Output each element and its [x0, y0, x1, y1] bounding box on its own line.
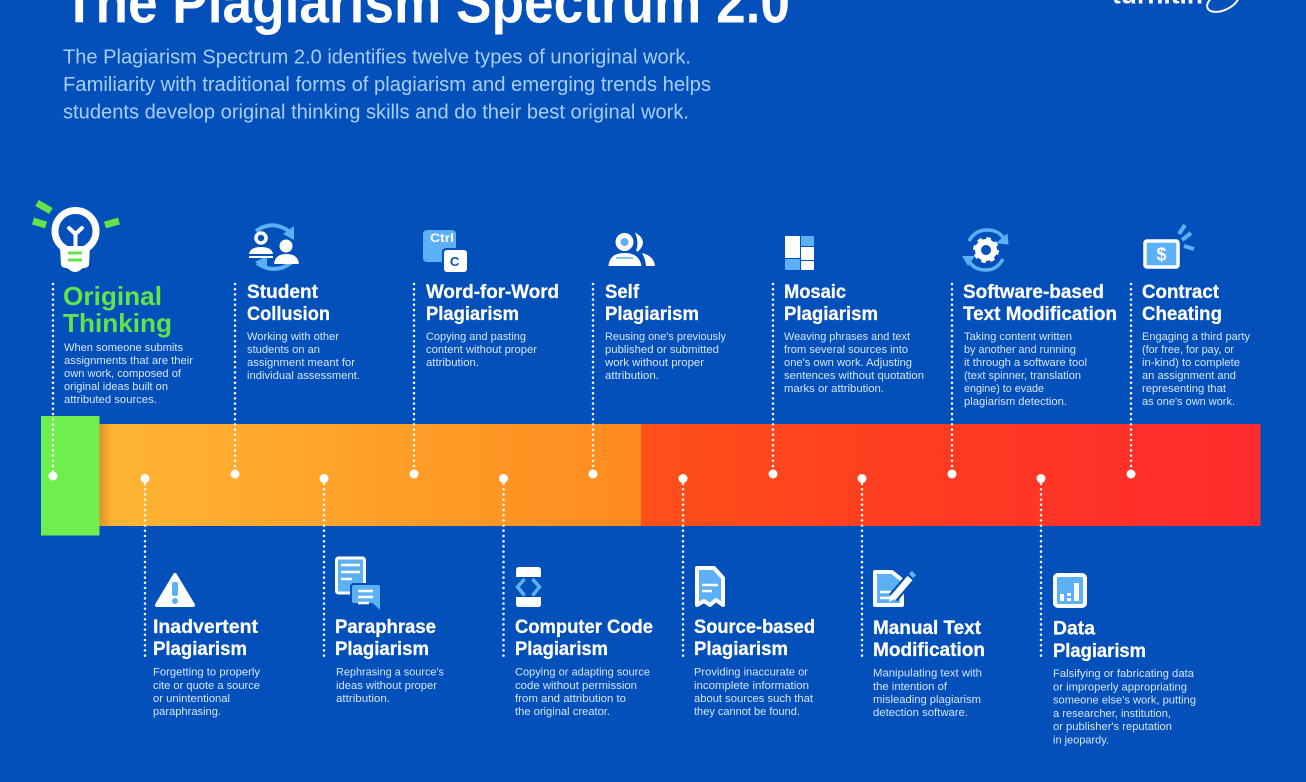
description: Forgetting to properly	[153, 666, 260, 678]
connector	[1130, 284, 1132, 470]
description: Rephrasing a source's	[336, 666, 444, 678]
description	[247, 331, 360, 382]
logo: turnitin	[1112, 0, 1242, 16]
marker dot	[1126, 470, 1136, 478]
heading: Plagiarism	[605, 304, 699, 325]
description: or improperly appropriating	[1053, 682, 1187, 694]
marker dot	[678, 474, 688, 483]
heading: Collusion	[247, 304, 330, 325]
heading: Cheating	[1142, 304, 1222, 325]
heading: Data	[1053, 618, 1095, 640]
heading	[873, 618, 985, 661]
description	[1142, 331, 1250, 408]
marker dot	[499, 474, 508, 483]
heading: Thinking	[63, 308, 172, 338]
description	[426, 331, 537, 369]
description	[694, 666, 814, 718]
description: or unintentional	[153, 693, 230, 705]
description	[1053, 668, 1196, 746]
marker dot	[858, 474, 866, 483]
marker dot	[48, 472, 58, 480]
connector	[234, 284, 236, 470]
intro text: students develop original thinking skills and do their best original work.	[63, 100, 689, 124]
connector	[861, 484, 863, 660]
description: a researcher, institution,	[1053, 708, 1171, 720]
description: attribution.	[426, 357, 479, 369]
description: about sources such that	[694, 693, 814, 705]
item: Mosaic Plagiarism	[768, 236, 924, 478]
item: Paraphrase Plagiarism	[320, 474, 444, 705]
icon: students exchanging	[249, 225, 299, 269]
description: Reusing one's previously	[605, 331, 726, 343]
item: Data Plagiarism	[1036, 474, 1196, 746]
heading	[426, 282, 559, 325]
item: Self Plagiarism	[588, 235, 726, 478]
description: assignment meant for	[247, 357, 355, 369]
description: assignments that are their	[64, 355, 193, 367]
heading: Plagiarism	[153, 639, 247, 660]
heading: Contract	[1142, 282, 1220, 303]
description	[784, 331, 924, 395]
description: one's own work. Adjusting	[784, 357, 912, 369]
icon: gear with cycle arrows	[962, 230, 1010, 270]
marker dot	[588, 470, 598, 478]
intro text: The Plagiarism Spectrum 2.0 identifies twelve types of unoriginal work.	[63, 46, 691, 68]
description: it through a software tool	[964, 357, 1087, 369]
item: Computer Code Plagiarism	[499, 474, 653, 718]
description: Copying or adapting source	[515, 666, 650, 678]
heading: Student	[247, 282, 319, 303]
icon: ctrl c: C	[450, 254, 460, 269]
description: Copying and pasting	[426, 331, 526, 343]
description: Weaving phrases and text	[784, 331, 911, 343]
heading	[153, 617, 259, 660]
description: content without proper	[426, 344, 537, 356]
item: Contract Cheating	[1126, 225, 1250, 478]
description: paraphrasing.	[153, 706, 221, 718]
description: Falsifying or fabricating data	[1053, 668, 1195, 680]
description: from several sources into	[784, 344, 908, 356]
description: they cannot be found.	[694, 706, 800, 718]
heading	[694, 617, 815, 660]
marker dot	[230, 470, 240, 478]
heading	[63, 281, 172, 338]
connector	[951, 284, 953, 470]
icon: money screen: $	[1156, 244, 1167, 264]
description: in-kind) to complete	[1142, 357, 1240, 369]
heading: Self	[605, 282, 640, 303]
item: Software-based Text Modification	[948, 230, 1117, 478]
spectrum bar	[41, 416, 1260, 536]
heading: Manual Text	[873, 618, 982, 639]
description: plagiarism detection.	[964, 396, 1067, 408]
description: Providing inaccurate or	[694, 666, 808, 678]
heading: Word-for-Word	[426, 282, 559, 303]
heading	[335, 617, 436, 660]
item: Word-for-Word Plagiarism	[410, 230, 559, 478]
description: attributed sources.	[64, 394, 157, 406]
description: by another and running	[964, 344, 1076, 356]
item: Source-based Plagiarism	[678, 474, 815, 718]
heading: Mosaic	[784, 282, 846, 303]
heading: Computer Code	[515, 617, 653, 638]
description: (for free, for pay, or	[1142, 344, 1234, 356]
description	[964, 331, 1087, 408]
connector	[144, 484, 146, 660]
description: Engaging a third party	[1142, 331, 1250, 343]
connector	[1040, 484, 1042, 660]
heading	[963, 282, 1117, 325]
description: Working with other	[247, 331, 339, 343]
item: Manual Text Modification	[858, 474, 985, 719]
heading: Plagiarism	[1053, 641, 1146, 662]
heading	[515, 617, 653, 660]
heading: Original	[63, 281, 162, 311]
description: in jeopardy.	[1053, 734, 1109, 746]
connector	[772, 284, 774, 470]
description: an assignment and	[1142, 370, 1236, 382]
description: marks or attribution.	[784, 383, 884, 395]
description: work without proper	[604, 357, 704, 369]
icon: document with pen	[875, 572, 914, 605]
marker dot	[320, 474, 328, 483]
heading: Modification	[873, 640, 985, 661]
heading	[1142, 282, 1222, 325]
connector	[413, 284, 415, 470]
heading	[1053, 618, 1146, 662]
heading: Inadvertent	[153, 617, 259, 638]
heading: Plagiarism	[784, 304, 878, 325]
description: attribution.	[605, 370, 659, 382]
heading: Text Modification	[963, 304, 1117, 325]
description: (text spinner, translation	[964, 370, 1081, 382]
heading	[605, 282, 699, 325]
description	[64, 342, 193, 406]
description: sentences without quotation	[784, 370, 924, 382]
icon: ctrl c	[423, 230, 469, 274]
marker dot	[1036, 474, 1046, 483]
heading: Plagiarism	[335, 639, 429, 660]
description	[153, 666, 260, 718]
description	[336, 666, 444, 705]
heading	[247, 282, 330, 325]
icon: code on phone	[516, 567, 541, 607]
description: ideas without proper	[336, 680, 437, 692]
intro text	[63, 46, 711, 124]
description: engine) to evade	[964, 383, 1044, 395]
description: code without permission	[515, 680, 637, 692]
heading: Plagiarism	[694, 639, 788, 660]
description: attribution.	[336, 693, 390, 705]
icon: mosaic tiles	[785, 236, 814, 270]
marker dot	[140, 474, 150, 483]
icon: light bulb	[33, 203, 119, 272]
marker dot	[948, 470, 956, 478]
heading: Paraphrase	[335, 617, 436, 638]
description: the original creator.	[515, 706, 610, 718]
connector	[502, 484, 505, 660]
description: detection software.	[873, 707, 968, 719]
description: When someone submits	[64, 342, 183, 354]
icon: money screen	[1145, 225, 1194, 267]
heading: Plagiarism	[426, 304, 519, 325]
description: Manipulating text with	[873, 668, 982, 680]
icon: ctrl c: Ctrl	[430, 233, 454, 245]
description: cite or quote a source	[153, 680, 260, 692]
description: the intention of	[873, 681, 948, 693]
description: Taking content written	[964, 331, 1072, 343]
marker dot	[768, 470, 778, 478]
description: misleading plagiarism	[873, 694, 981, 706]
description: representing that	[1142, 383, 1227, 395]
heading: Software-based	[963, 282, 1104, 303]
description: individual assessment.	[247, 370, 360, 382]
description: incomplete information	[694, 680, 809, 692]
description: from and attribution to	[515, 693, 626, 705]
intro text: Familiarity with traditional forms of plagiarism and emerging trends helps	[63, 73, 711, 96]
description: or publisher's reputation	[1053, 721, 1172, 733]
connector	[52, 284, 54, 472]
icon: bar chart	[1055, 575, 1085, 606]
description: own work, composed of	[64, 368, 182, 380]
connector	[323, 484, 325, 660]
description	[604, 331, 726, 382]
heading: Plagiarism	[515, 639, 608, 660]
description	[873, 668, 982, 719]
marker dot	[410, 470, 418, 478]
heading	[784, 282, 878, 325]
item: Student Collusion	[230, 225, 360, 478]
icon: document and speech bubble	[336, 558, 381, 612]
connector	[592, 284, 594, 470]
description: as one's own work.	[1142, 396, 1235, 408]
item: Original Thinking	[33, 203, 193, 480]
heading: Source-based	[694, 617, 815, 638]
description: someone else's work, putting	[1053, 694, 1196, 706]
icon: person and shadow	[608, 235, 655, 266]
description: published or submitted	[605, 344, 719, 356]
description: original ideas built on	[64, 381, 168, 393]
icon: torn document	[697, 568, 723, 605]
icon: warning triangle	[157, 575, 193, 605]
item: Inadvertent Plagiarism	[140, 474, 260, 718]
connector	[682, 484, 684, 660]
description: students on an	[247, 344, 320, 356]
description	[515, 666, 650, 718]
